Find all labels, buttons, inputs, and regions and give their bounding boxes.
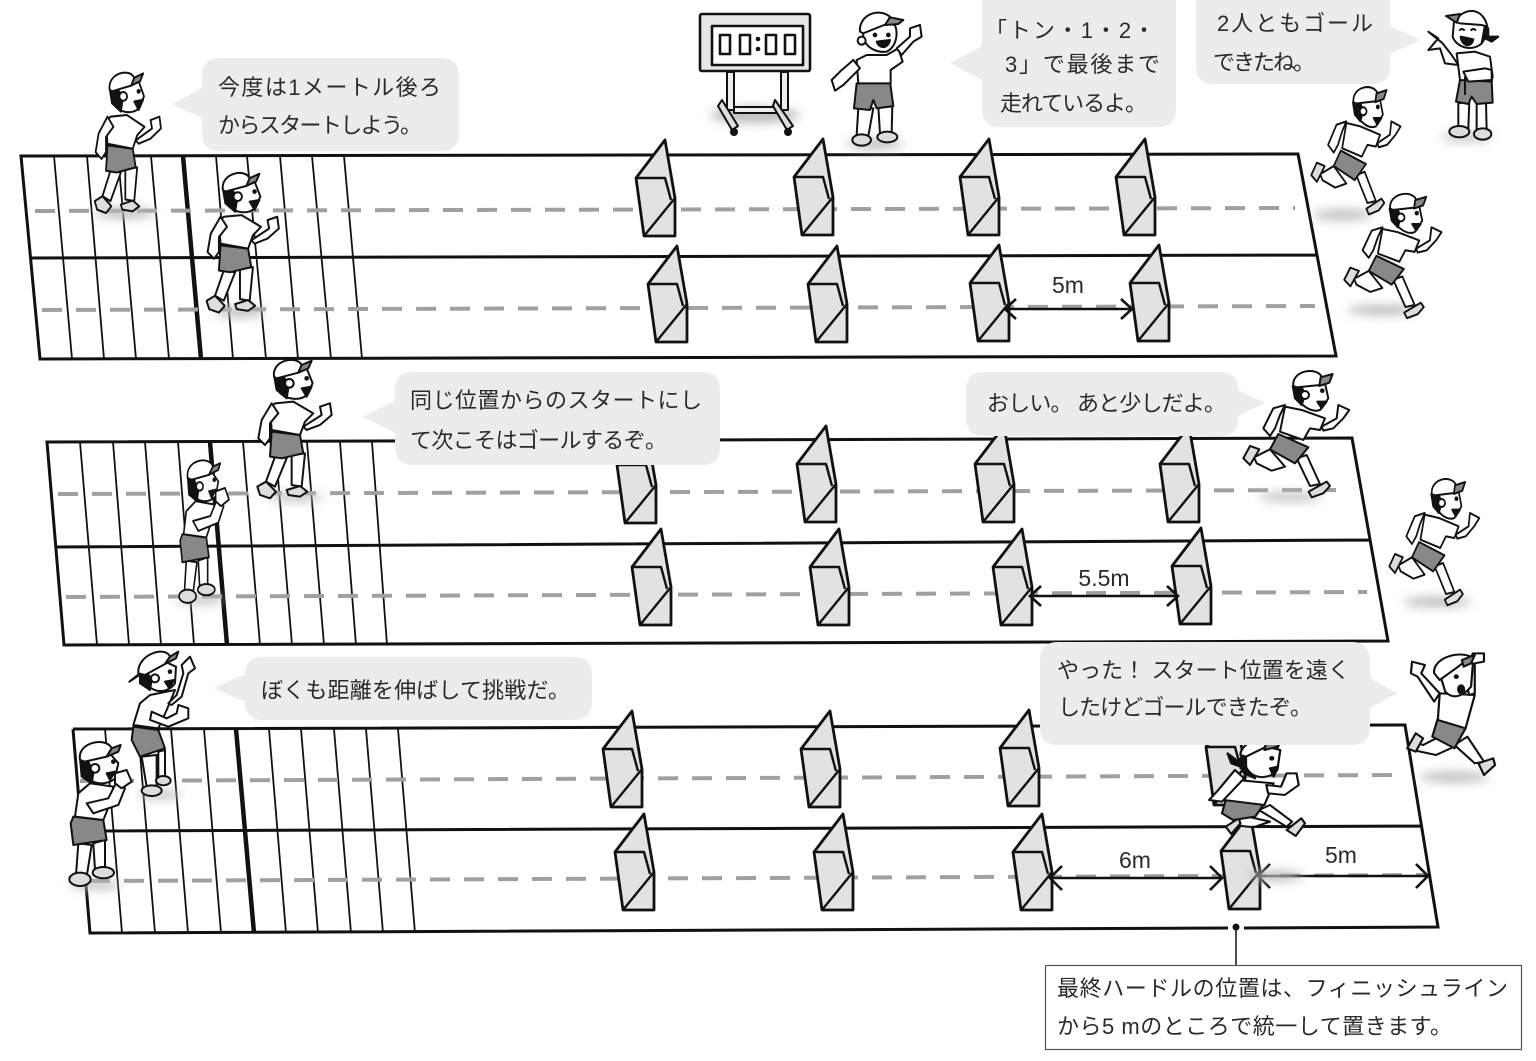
speech bubble: extend distance: ぼくも距離を伸ばして挑戦だ。 <box>261 678 570 703</box>
arrow: 6m row 3: 6m <box>1119 847 1151 873</box>
speech bubble: running to the end: 「トン・1・2・ <box>985 18 1155 43</box>
arrow: 5.5m row 2: 5.5m <box>1078 565 1130 591</box>
arrow: 5m finish row 3 <box>1258 842 1428 888</box>
figure: girl running right of row 2 <box>1389 479 1479 605</box>
figure: boy walking row 2 <box>257 360 332 498</box>
figure: girl pointing top right <box>1428 11 1498 140</box>
scoreboard <box>700 14 810 136</box>
speech bubble: so close <box>966 372 1265 436</box>
speech bubble: extend distance <box>214 657 592 720</box>
figure: girl running row 1 <box>1311 87 1401 214</box>
speech bubble: reached the goal: やった！ スタート位置を遠く <box>1057 658 1350 683</box>
speech bubble: restart one meter back: からスタートしよう。 <box>218 113 422 138</box>
speech bubble: both reached goal <box>1196 0 1420 84</box>
figure: girl jumping hurdle <box>1209 738 1305 836</box>
figure: boy running row 2 <box>1243 371 1349 497</box>
hurdles: row 1 <box>636 139 1169 342</box>
track: row 1 <box>21 154 1336 359</box>
callout: final hurdle position <box>1046 966 1522 1050</box>
arrow: 5m row 1 <box>1005 272 1132 319</box>
figure: boy cheering row 3 <box>69 742 132 886</box>
speech bubble: so close: おしい。 あと少しだよ。 <box>987 391 1226 416</box>
figure: girl walking top left <box>95 73 161 213</box>
arrow: 5m row 1: 5m <box>1052 272 1084 298</box>
speech bubble: restart one meter back: 今度は1メートル後ろ <box>218 75 441 100</box>
hurdles: row 3 <box>603 709 1260 910</box>
figure: girl standing row 2 <box>179 460 229 603</box>
arrow: 5m finish row 3: 5m <box>1325 842 1357 868</box>
arrow: 6m row 3 <box>1050 847 1222 890</box>
callout: final hurdle position: から5 mのところで統一して置きます。 <box>1057 1014 1452 1039</box>
speech bubble: reached the goal: したけどゴールできたぞ。 <box>1058 695 1312 720</box>
speech bubble: running to the end <box>950 0 1176 127</box>
figure: boy jumping at finish <box>1407 653 1495 775</box>
speech bubble: restart one meter back <box>172 58 459 151</box>
speech bubble: reached the goal <box>1040 642 1397 745</box>
speech bubble: same start position <box>363 372 720 465</box>
speech bubble: both reached goal: できたね。 <box>1213 50 1315 75</box>
shadows under figures <box>69 107 1493 889</box>
speech bubble: same start position: て次こそはゴールするぞ。 <box>410 428 667 453</box>
arrow: 5.5m row 2 <box>1030 565 1178 606</box>
figure: boy running row 1 <box>1344 194 1442 318</box>
hurdles: row 2 <box>617 426 1211 625</box>
speech bubble: same start position: 同じ位置からのスタートにし <box>410 388 702 413</box>
speech bubble: running to the end: 走れているよ。 <box>1000 91 1147 116</box>
speech bubble: both reached goal: 2人ともゴール <box>1217 11 1373 36</box>
track: row 3 <box>73 725 1438 933</box>
track: row 2 <box>47 438 1388 645</box>
figure: boy by scoreboard <box>832 13 922 146</box>
callout: final hurdle position: 最終ハードルの位置は、フィニッシュライン <box>1057 976 1508 1001</box>
figure: girl cheering row 3 <box>129 652 195 796</box>
speech bubble: running to the end: 3」で最後まで <box>1005 52 1160 77</box>
figure: boy walking row 1 <box>207 173 279 313</box>
callout leader line <box>1232 924 1240 965</box>
